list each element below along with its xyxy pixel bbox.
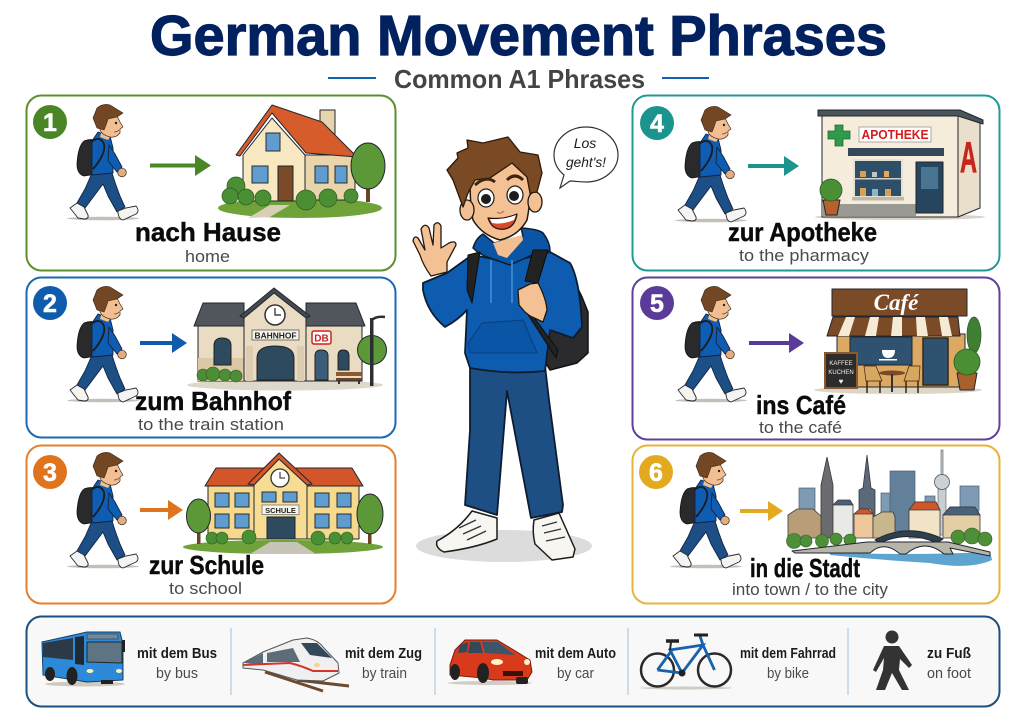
left shoe: [437, 511, 497, 552]
label: mit dem Zug: mit dem Zug: [345, 646, 422, 662]
number badge 5: 5: [650, 290, 664, 318]
number badge 6: 6: [649, 459, 663, 487]
icon: car: [448, 640, 532, 685]
label: zu Fuß: zu Fuß: [927, 646, 971, 662]
arrow: [749, 333, 804, 353]
panel 2: zum Bahnhof: [26, 278, 396, 438]
walking boy: [67, 286, 139, 402]
icon: bus: [42, 632, 125, 686]
number badge 3: [33, 455, 67, 489]
label: zu Fuß: on foot: [927, 666, 971, 682]
backpack straps: [467, 250, 558, 358]
hood: [473, 228, 550, 265]
translation: to the café: to the café: [759, 419, 842, 437]
icon: pedestrian: [873, 630, 912, 690]
icon: house: [218, 105, 385, 218]
label: mit dem Zug: by train: [362, 666, 407, 682]
number badge 2: 2: [43, 290, 57, 318]
speech bubble: geht's!: [566, 154, 606, 170]
walking boy: [67, 452, 139, 568]
label: nach Hause: nach Hause: [135, 217, 281, 247]
translation: to school: to school: [169, 580, 242, 598]
icon: cafe: KUCHEN: [828, 370, 854, 376]
hoodie and sleeves: [423, 252, 582, 372]
label: zum Bahnhof: zum Bahnhof: [135, 386, 291, 416]
label: mit dem Auto: by car: [557, 666, 594, 682]
icon: pharmacy: [815, 110, 985, 220]
number badge 2: [33, 286, 67, 320]
panel: transport bar: [26, 616, 1000, 706]
ground shadow: [416, 530, 592, 562]
subtitle: Common A1 Phrases: [394, 64, 645, 94]
panel 5: ins Café: [632, 278, 1000, 440]
translation: home: home: [185, 248, 230, 266]
right shoe: [533, 513, 575, 560]
number badge 1: [33, 105, 67, 139]
walking boy: [675, 106, 747, 222]
label: mit dem Fahrrad: by bike: [767, 666, 809, 682]
icon: cafe: ♥: [839, 377, 844, 386]
walking boy: [67, 104, 139, 220]
walking boy: [675, 286, 747, 402]
number badge 6: [639, 455, 673, 489]
label: mit dem Zug: [345, 646, 422, 682]
icon: cafe: [814, 289, 982, 394]
label: zu Fuß: [927, 646, 971, 682]
icon: bicycle: [640, 635, 732, 690]
label: zur Schule: zur Schule: [149, 550, 264, 580]
translation: to the pharmacy: to the pharmacy: [739, 247, 870, 265]
arrow: [140, 500, 183, 520]
label: mit dem Fahrrad: mit dem Fahrrad: [740, 646, 836, 662]
translation: to the train station: to the train station: [138, 416, 284, 434]
number badge 1: 1: [43, 109, 57, 137]
number badge 4: [640, 106, 674, 140]
label: mit dem Auto: [535, 646, 616, 682]
walking boy: [670, 452, 742, 568]
icon: cafe: KAFFEE: [829, 361, 853, 367]
title: German Movement Phrases: [150, 4, 887, 68]
jeans: [465, 366, 563, 518]
left waving hand: [413, 223, 456, 276]
number badge 4: 4: [650, 110, 664, 138]
icon: city skyline: [786, 450, 992, 566]
right fist: [518, 283, 547, 322]
label: in die Stadt: in die Stadt: [750, 553, 860, 583]
icon: train: [243, 638, 349, 691]
hair: [447, 137, 542, 207]
icon: train station: BAHNHOF: [254, 330, 296, 340]
icon: pharmacy: APOTHEKE: [862, 128, 928, 142]
icon: pharmacy: A: [960, 133, 977, 182]
arrow: [140, 333, 187, 353]
panel 4: zur Apotheke: [632, 96, 1000, 270]
panel 6: in die Stadt: [632, 446, 1000, 604]
backpack: [535, 262, 588, 370]
panel 1: nach Hause: [26, 96, 396, 270]
icon: school: [183, 453, 383, 554]
label: mit dem Bus: [137, 646, 217, 682]
icon: train station: [187, 288, 386, 390]
panel 3: zur Schule: [26, 446, 396, 604]
label: zur Apotheke: zur Apotheke: [728, 217, 877, 247]
speech bubble: Los: [574, 135, 596, 151]
face: [475, 176, 523, 229]
number badge 3: 3: [43, 459, 57, 487]
label: mit dem Bus: by bus: [156, 666, 198, 682]
icon: school: SCHULE: [265, 506, 296, 515]
number badge 5: [640, 286, 674, 320]
label: mit dem Bus: mit dem Bus: [137, 646, 217, 662]
speech bubble: [554, 127, 618, 188]
head: [470, 158, 531, 240]
arrow: [748, 156, 799, 176]
arrow: [740, 501, 783, 521]
label: mit dem Auto: mit dem Auto: [535, 646, 616, 662]
central boy waving: [413, 137, 592, 562]
label: ins Café: ins Café: [756, 390, 846, 420]
translation: into town / to the city: into town / to the city: [732, 581, 889, 599]
icon: cafe: Café: [874, 290, 919, 315]
arrow: [150, 155, 211, 176]
icon: train station: DB: [314, 334, 329, 344]
label: mit dem Fahrrad: [740, 646, 836, 682]
